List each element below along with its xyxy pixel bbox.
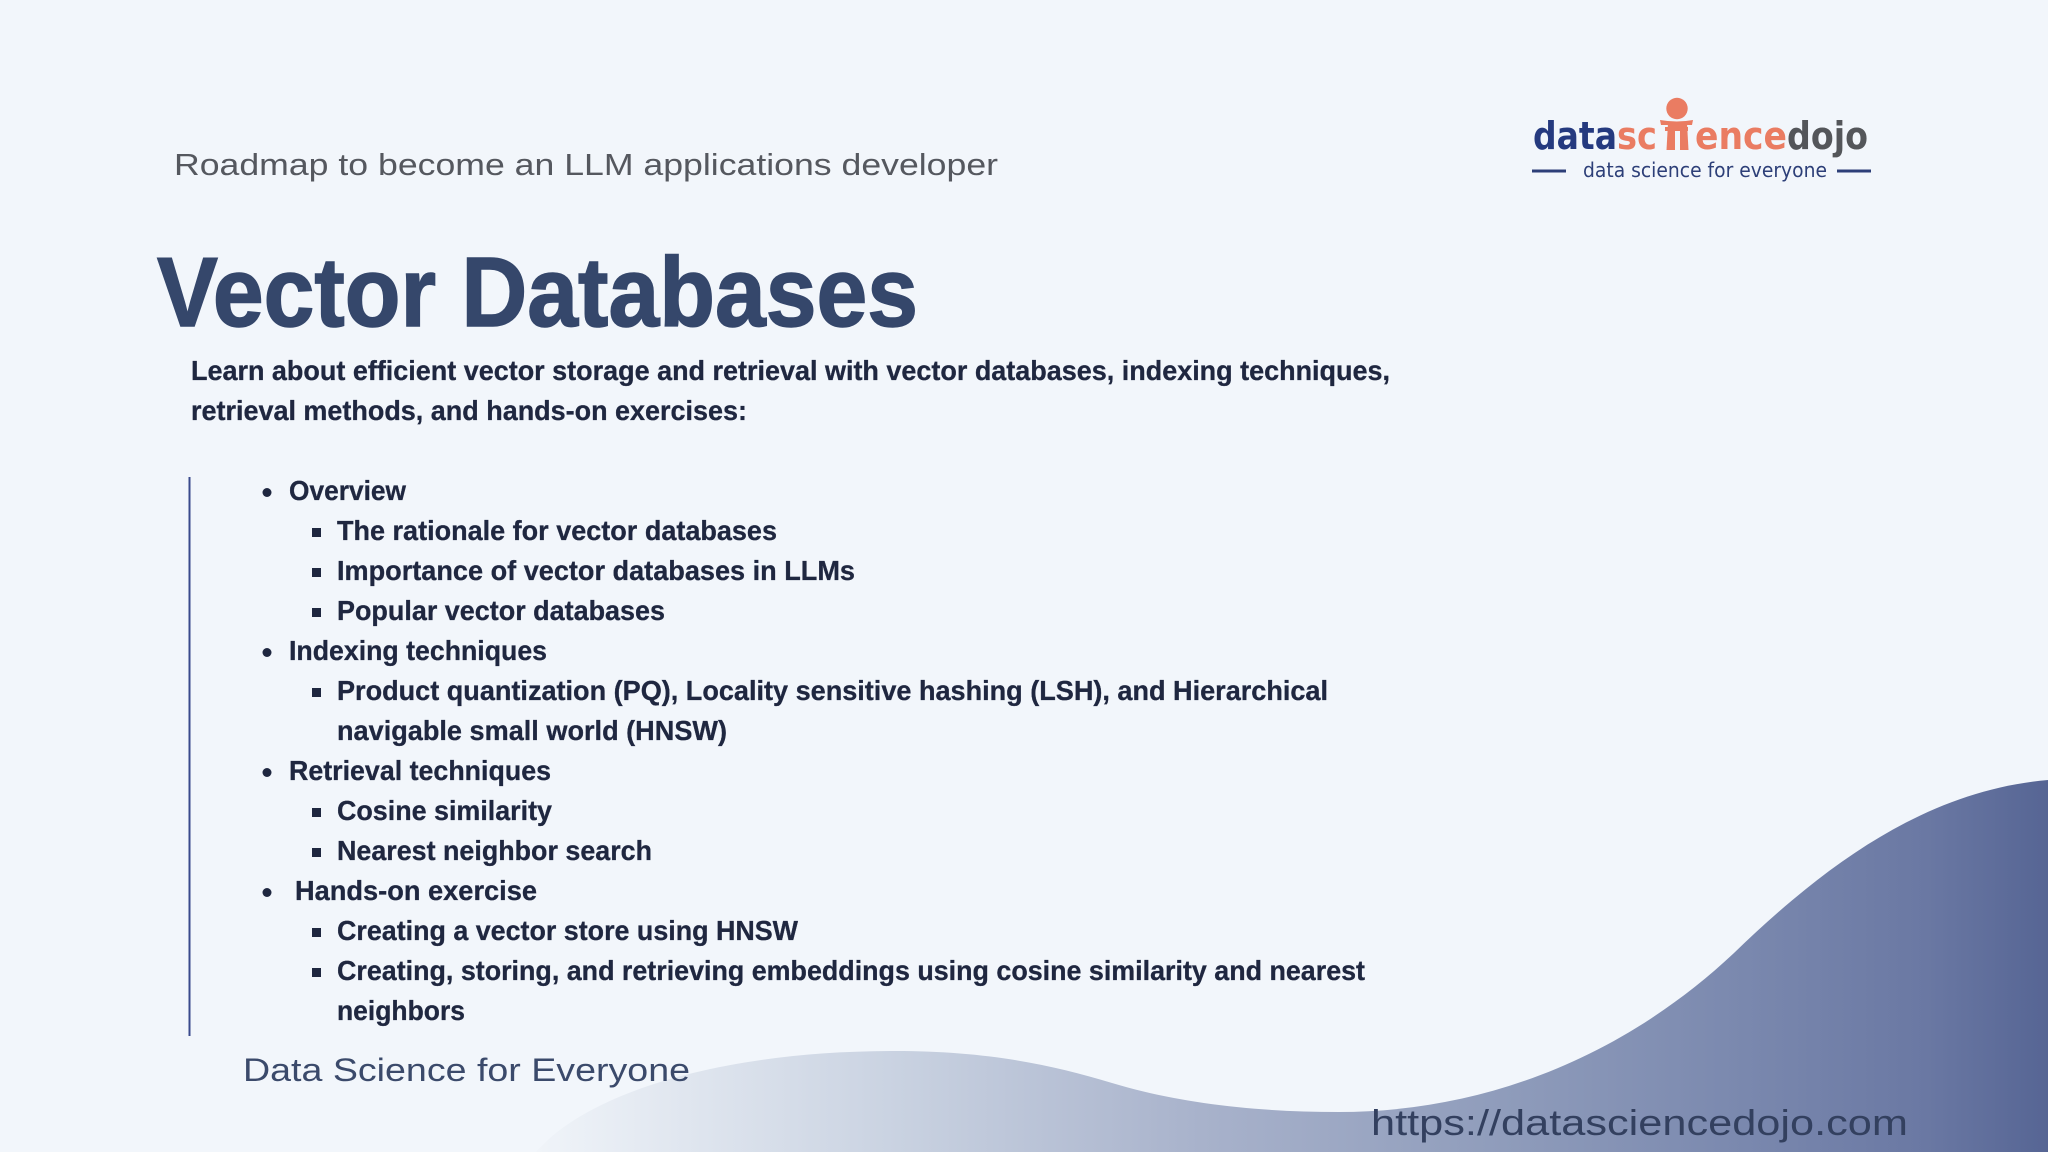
intro text: Learn about efficient vector storage and retrieval with vector databases, indexing techniques,: [191, 355, 1390, 386]
logo wordmark: data: [1533, 114, 1617, 158]
item: retrieval techniques: Retrieval techniques: [289, 755, 551, 786]
title: Vector Databases: [157, 237, 918, 347]
logo: data science dojo: [1532, 98, 1871, 182]
topic list: [262, 475, 1365, 1026]
item: indexing techniques: navigable small world (HNSW): [337, 715, 727, 746]
logo rule right: [1837, 170, 1871, 172]
logo: data science dojo: dojo: [1787, 114, 1868, 158]
logo rule left: [1532, 170, 1566, 172]
item: hands-on exercise: Hands-on exercise: [295, 875, 537, 906]
item: hands-on exercise: Creating, storing, and retrieving embeddings using cosine similarity and nearest: [337, 955, 1365, 986]
item: hands-on exercise: Creating a vector store using HNSW: [337, 915, 799, 946]
intro text: [191, 355, 1390, 426]
logo: data science dojo: ence: [1695, 114, 1787, 158]
logo icon: torii gate with sun: [1660, 98, 1693, 150]
item: hands-on exercise: [262, 875, 1365, 1026]
vertical accent line: [188, 477, 190, 1036]
item: indexing techniques: Indexing techniques: [289, 635, 547, 666]
item: overview: The rationale for vector databases: [337, 515, 777, 546]
subtitle: Roadmap to become an LLM applications developer: [174, 147, 998, 182]
item: retrieval techniques: Cosine similarity: [337, 795, 552, 826]
decorative wave: [536, 780, 2048, 1152]
item: overview: [262, 475, 855, 626]
item: hands-on exercise: neighbors: [337, 995, 465, 1026]
logo: data science dojo: sc: [1617, 114, 1657, 158]
footer tagline: Data Science for Everyone: [243, 1052, 690, 1088]
item: indexing techniques: [262, 635, 1328, 746]
item: indexing techniques: Product quantization (PQ), Locality sensitive hashing (LSH), and Hierarchical: [337, 675, 1328, 706]
intro text: retrieval methods, and hands-on exercises:: [191, 395, 747, 426]
item: overview: Popular vector databases: [337, 595, 665, 626]
item: overview: Importance of vector databases in LLMs: [337, 555, 855, 586]
logo tagline: data science for everyone: [1583, 158, 1827, 182]
item: retrieval techniques: [262, 755, 652, 866]
item: overview: Overview: [289, 475, 406, 506]
item: retrieval techniques: Nearest neighbor search: [337, 835, 652, 866]
footer url: https://datasciencedojo.com: [1371, 1102, 1908, 1143]
